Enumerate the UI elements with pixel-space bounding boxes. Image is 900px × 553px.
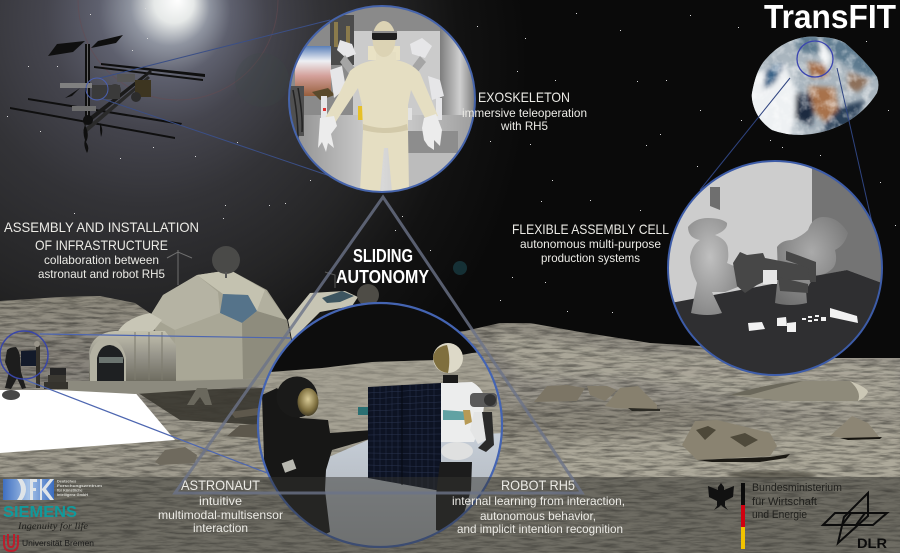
text block: flexible assembly cell: autonomous multi-purpose <box>520 237 661 251</box>
circle inset: exoskeleton <box>285 0 480 200</box>
text block: flexible assembly cell: production systems <box>541 251 640 265</box>
site to astronaut callout lines <box>23 334 290 473</box>
heading: sliding autonomy <box>336 246 429 287</box>
text block: robot RH5: autonomous behavior, <box>480 509 596 523</box>
text block: assembly and installation: collaboration between <box>44 253 159 267</box>
text block: assembly and installation: OF INFRASTRUCTURE <box>35 237 168 253</box>
logo: Siemens: Ingenuity for life <box>17 521 88 531</box>
ISS space station <box>10 35 205 153</box>
text block: flexible assembly cell <box>512 221 669 265</box>
logo: DFKI: Intelligenz GmbH <box>57 493 88 497</box>
text block: astronaut: interaction <box>193 521 248 535</box>
text block: exoskeleton: immersive teleoperation <box>462 106 587 120</box>
text block: exoskeleton <box>462 89 587 133</box>
logo: DFKI: für Künstliche <box>57 488 83 492</box>
text block: robot RH5: and implicit intention recognition <box>457 522 623 536</box>
logo: DLR: DLR <box>857 535 887 551</box>
heading: sliding autonomy: AUTONOMY <box>336 267 429 287</box>
teal antenna detail <box>358 407 368 415</box>
solar panel <box>368 383 441 491</box>
left robot arm <box>688 218 743 315</box>
astronaut <box>262 388 368 534</box>
text block: robot RH5: internal learning from interaction, <box>452 494 625 508</box>
text block: exoskeleton: with RH5 <box>500 119 548 133</box>
circle: site highlight <box>0 331 48 379</box>
circle inset: flexible assembly cell <box>665 160 890 380</box>
logo: DFKI: Deutsches <box>57 480 76 484</box>
logo: federal ministry: Bundesministerium <box>752 482 842 494</box>
logo: DFKI: Forschungszentrum <box>57 484 103 488</box>
text block: exoskeleton: EXOSKELETON <box>478 89 570 105</box>
Earth to assembly cell callout lines <box>700 68 873 227</box>
logo: Universität Bremen <box>4 534 94 551</box>
logo: Universität Bremen: Universität Bremen <box>22 539 94 548</box>
logo: federal ministry: und Energie <box>752 509 807 521</box>
text block: astronaut: multimodal-multisensor <box>158 508 283 522</box>
sliding autonomy triangle <box>175 197 582 493</box>
moon surface terrain <box>0 296 900 553</box>
moon rocks <box>155 381 882 465</box>
Earth <box>752 36 878 135</box>
heading: sliding autonomy: SLIDING <box>353 246 413 266</box>
ISS highlight circle <box>86 78 108 100</box>
text block: assembly and installation: ASSEMBLY AND INSTALLATION <box>4 219 199 235</box>
logo: Siemens: SIEMENS <box>3 504 77 521</box>
text block: astronaut: intuitive <box>199 494 242 508</box>
bottom translucent band <box>0 477 900 553</box>
small circle: astronaut and robot on site <box>2 341 68 400</box>
Earth highlight circle <box>797 41 833 77</box>
text block: astronaut: ASTRONAUT <box>181 477 260 493</box>
text block: assembly and installation: astronaut and robot RH5 <box>38 267 165 281</box>
exoskeleton figure <box>325 52 438 192</box>
text block: robot RH5 <box>452 477 625 536</box>
text block: astronaut <box>158 477 283 535</box>
circle inset: astronaut and robot RH5 <box>255 300 505 550</box>
text block: robot RH5: ROBOT RH5 <box>501 477 575 493</box>
logo: DLR <box>823 493 887 551</box>
right robot arm <box>775 217 848 305</box>
logo: federal ministry <box>708 482 842 549</box>
robot RH5 <box>436 462 472 535</box>
logo: Siemens <box>3 504 88 531</box>
text block: flexible assembly cell: FLEXIBLE ASSEMBLY CELL <box>512 221 669 237</box>
logo: federal ministry: für Wirtschaft <box>752 496 817 508</box>
white reflective ground sheet <box>0 390 175 453</box>
moon base habitat <box>57 246 379 425</box>
ISS to exoskeleton callout lines <box>100 20 330 176</box>
text block: assembly and installation <box>4 219 199 281</box>
logo: DFKI <box>3 479 103 500</box>
